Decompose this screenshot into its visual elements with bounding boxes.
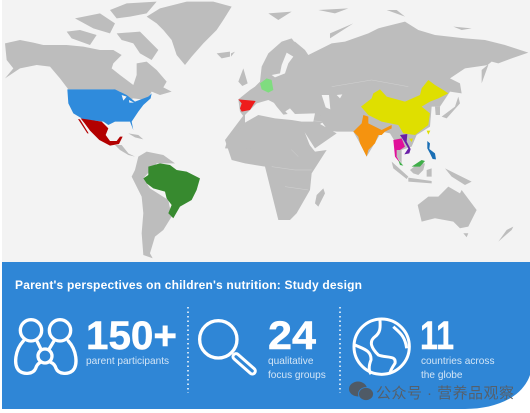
map: USA and Mexico	[67, 89, 152, 146]
sea: Baltic	[272, 53, 293, 77]
icon: chat bubbles	[349, 382, 374, 400]
divider	[187, 307, 189, 393]
country: Vietnam	[400, 134, 411, 154]
Great Lakes	[122, 95, 134, 103]
map: Americas	[5, 2, 232, 258]
land: New Zealand	[463, 227, 513, 242]
land: Madagascar, Arctic and Asian islands	[268, 8, 472, 207]
stat: 24 qualitative focus groups: qualitative	[268, 356, 314, 367]
country: China	[361, 80, 448, 142]
country: Spain	[238, 99, 256, 112]
icon: parents and child	[16, 320, 76, 373]
land: Eurasia	[252, 22, 528, 163]
stat: 11 countries across the globe: the globe	[421, 370, 463, 381]
land: South America	[132, 152, 175, 258]
panel: study design	[2, 262, 530, 409]
country: Malaysia	[398, 160, 425, 167]
land: Greenland	[147, 2, 232, 65]
land: Arctic islands	[67, 2, 158, 60]
land: UK and Ireland	[231, 52, 248, 86]
map: Asia, Africa and Oceania	[225, 8, 528, 242]
watermark: 公众号 · 营养品观察	[376, 384, 514, 402]
stat: 24 qualitative focus groups: 24	[268, 314, 317, 358]
stat: 11 countries across the globe	[420, 314, 494, 381]
seas: Black, Caspian, Aral	[292, 93, 342, 109]
heading: Parent's perspectives on children's nutrition: Study design	[15, 278, 362, 292]
land: Canada and Alaska	[5, 40, 172, 100]
land: North Africa	[225, 115, 312, 150]
map: Europe and North Africa	[225, 38, 322, 150]
divider	[339, 307, 341, 393]
icon: globe	[354, 319, 409, 374]
country: Germany	[260, 78, 273, 93]
land: Africa	[225, 113, 327, 220]
stat: 24 qualitative focus groups	[268, 314, 326, 381]
country: USA	[67, 89, 152, 130]
stat: 11 countries across the globe: countries across	[421, 356, 494, 367]
land: Iceland	[217, 52, 230, 58]
land: Indonesia and New Guinea	[392, 162, 472, 185]
land: Italy and Turkey	[270, 97, 318, 115]
stat: 150+ parent participants: parent participants	[86, 356, 169, 367]
sea: Mediterranean	[245, 100, 315, 123]
country: Thailand	[393, 138, 405, 165]
land: Australia	[418, 187, 477, 228]
stat: 11 countries across the globe: 11	[420, 314, 454, 358]
world map	[5, 2, 528, 258]
stat: 24 qualitative focus groups: focus groups	[268, 370, 326, 381]
land: Europe mainland	[238, 38, 322, 118]
icon: magnifying glass	[200, 321, 252, 371]
watermark	[349, 382, 514, 402]
country: Mexico	[78, 118, 123, 146]
land: Central America and Caribbean	[115, 133, 143, 157]
country: India	[353, 115, 392, 157]
country: Philippines	[427, 141, 436, 159]
country: Brazil	[143, 163, 200, 218]
stat: 150+ parent participants: 150+	[86, 314, 177, 358]
